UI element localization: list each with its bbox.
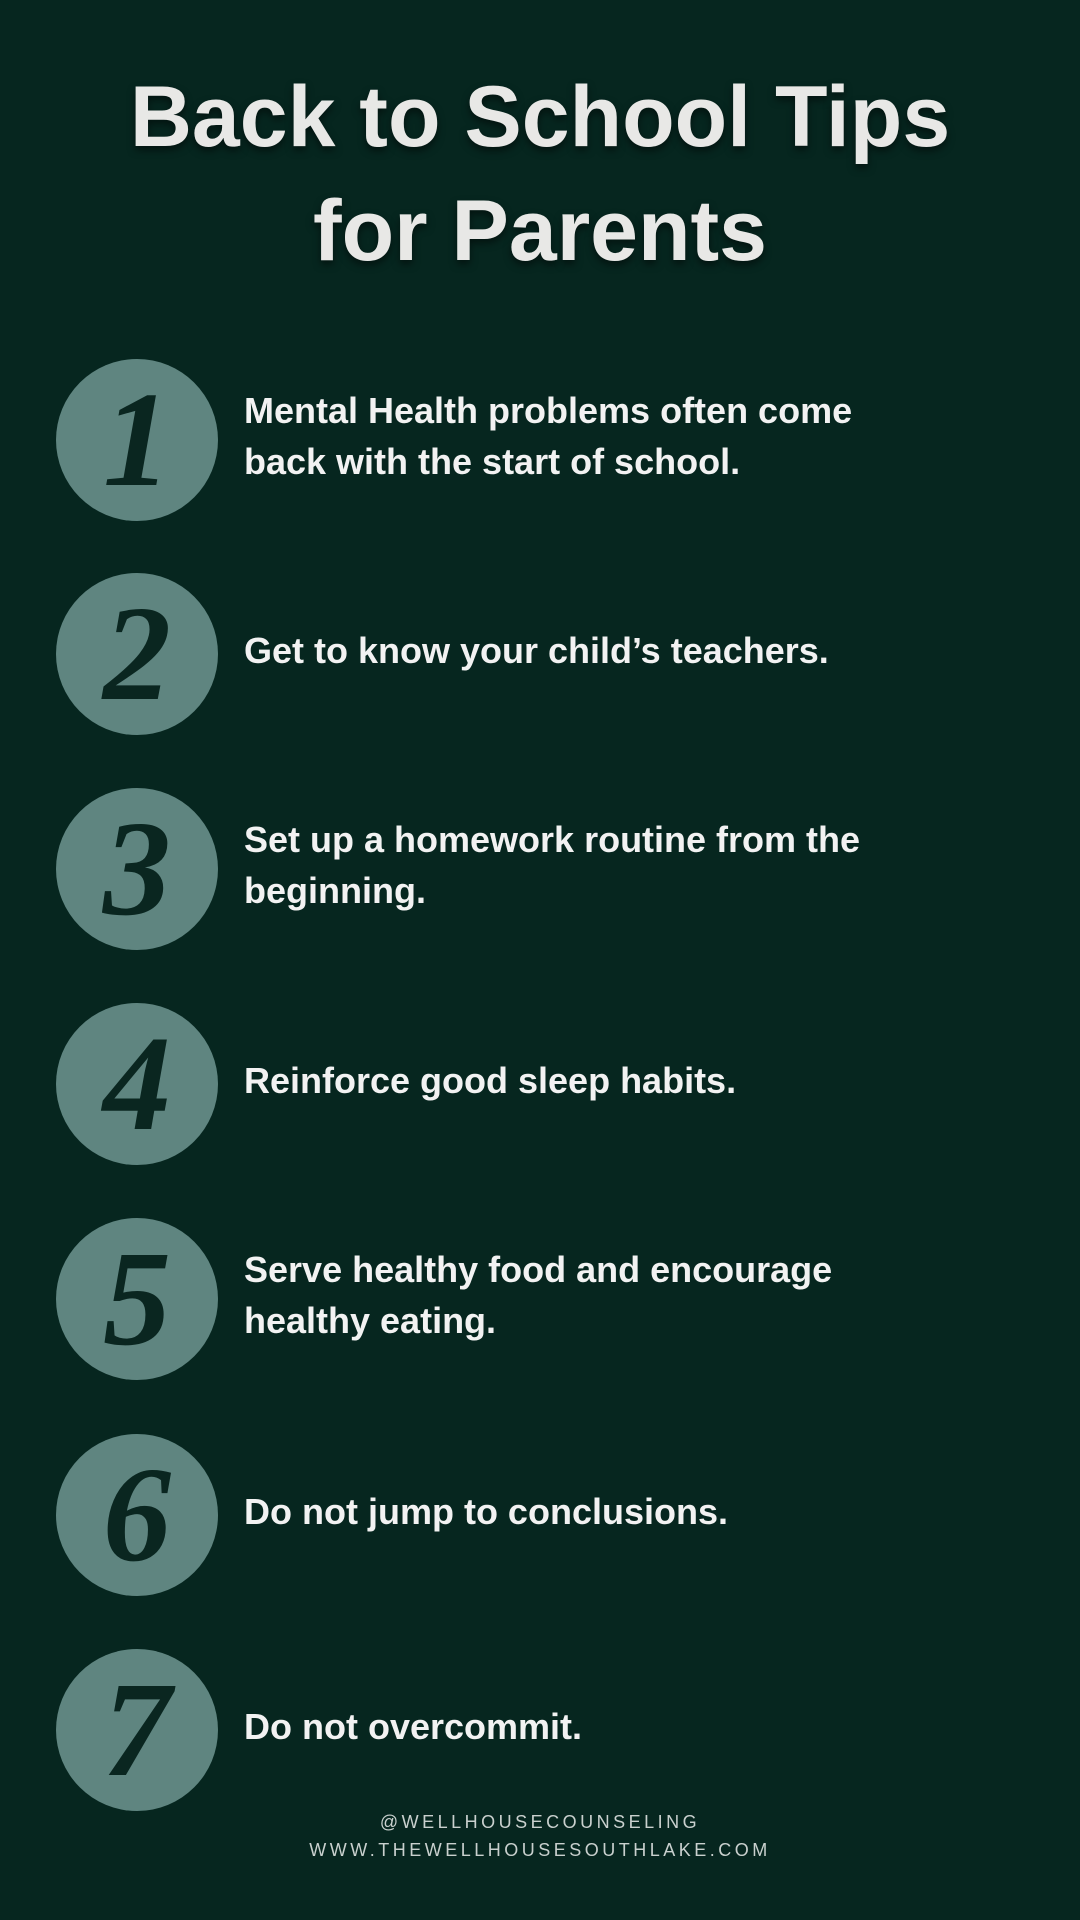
tip 2	[56, 573, 829, 735]
icon: number 2	[56, 573, 218, 735]
text: tip 3: Set up a homework routine from the beginning.	[244, 819, 860, 911]
text: tip 1: Mental Health problems often come back with the start of school.	[244, 390, 852, 482]
text: tip 2: Get to know your child’s teachers.	[244, 630, 829, 670]
text: tip 4: Reinforce good sleep habits.	[244, 1060, 736, 1100]
icon: number 1	[56, 359, 218, 521]
icon: number 3: 3	[103, 794, 171, 944]
footer: @WELLHOUSECOUNSELING	[380, 1812, 700, 1832]
tip 1	[56, 359, 852, 521]
icon: number 5	[56, 1218, 218, 1380]
tip 3	[56, 788, 860, 950]
title: Back to School Tips	[130, 69, 950, 165]
tip 5	[56, 1218, 832, 1380]
icon: number 2: 2	[103, 579, 171, 729]
footer	[309, 1812, 771, 1860]
icon: number 5: 5	[103, 1224, 171, 1374]
icon: number 6	[56, 1434, 218, 1596]
title	[130, 69, 950, 279]
icon: number 7	[56, 1649, 218, 1811]
tip 6	[56, 1434, 728, 1596]
icon: number 4	[56, 1003, 218, 1165]
icon: number 7: 7	[103, 1655, 171, 1805]
icon: number 3	[56, 788, 218, 950]
text: tip 6: Do not jump to conclusions.	[244, 1490, 728, 1532]
tip 7	[56, 1649, 582, 1811]
text: tip 5: Serve healthy food and encourage healthy eating.	[244, 1249, 832, 1341]
icon: number 4: 4	[103, 1009, 171, 1159]
tip 4	[56, 1003, 736, 1165]
icon: number 1: 1	[103, 365, 171, 515]
text: tip 7: Do not overcommit.	[244, 1706, 582, 1746]
title: for Parents	[313, 183, 767, 279]
footer: WWW.THEWELLHOUSESOUTHLAKE.COM	[309, 1840, 771, 1860]
icon: number 6: 6	[103, 1440, 171, 1590]
